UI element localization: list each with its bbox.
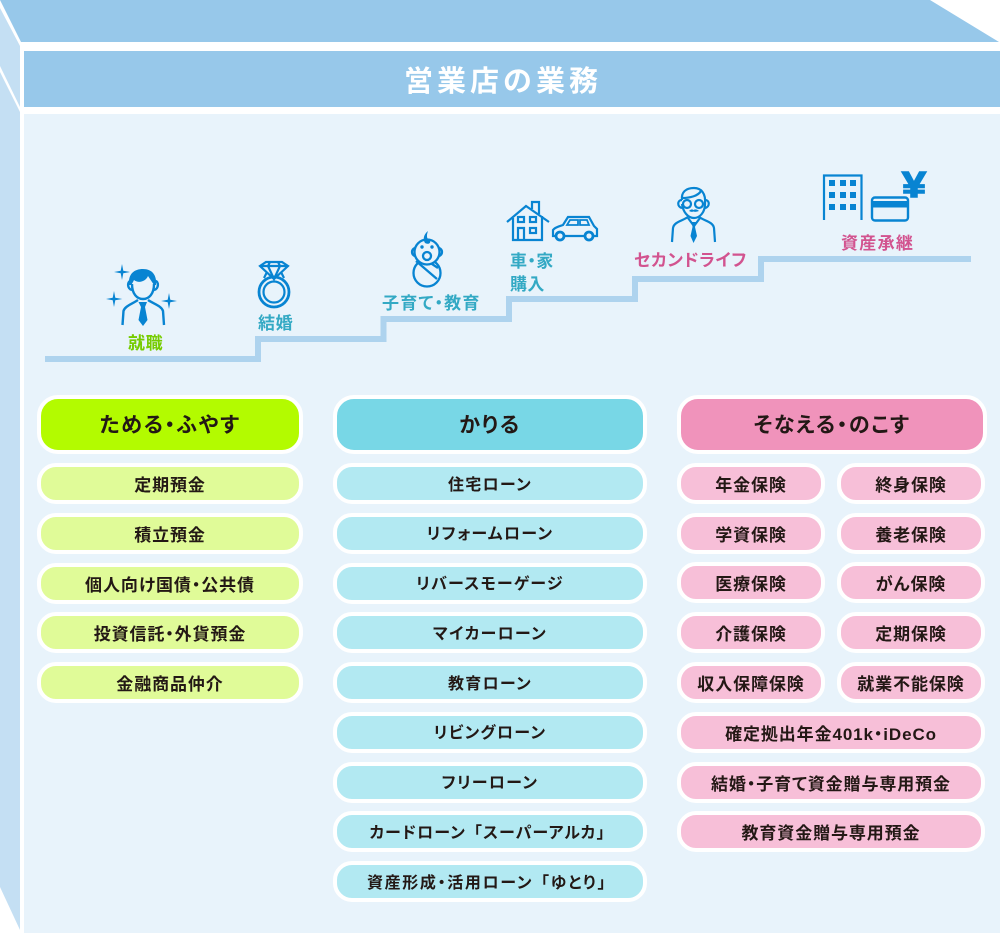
item: 定期保険 [875,625,947,644]
icon: building, card and yen [822,165,928,222]
item: マイカーローン [433,626,547,643]
item [37,513,303,554]
item: リビングローン [434,725,546,742]
item: 教育ローン [448,676,532,692]
label: 車・家 購入: 購入 [510,275,545,294]
item [677,513,825,554]
item: 終身保険 [875,476,947,495]
item [677,712,985,753]
item [37,562,303,604]
item: 確定拠出年金401k・iDeCo [725,725,937,744]
icon: wedding ring [258,260,290,308]
icon: building, card and yen: ¥ [902,165,926,205]
item: 医療保険 [715,574,787,594]
item: 定期預金 [134,476,206,495]
item [333,513,647,554]
item [333,612,647,653]
item [677,463,825,504]
item: 投資信託・外貨預金 [94,625,246,644]
item [37,662,303,703]
item [333,463,647,504]
heading [333,395,647,454]
item: 年金保険 [715,476,787,495]
item: 収入保障保険 [697,675,805,694]
item [837,463,985,504]
item: 養老保険 [875,526,947,545]
icon: employee with sparkles [106,264,177,326]
item: 住宅ローン [448,476,532,494]
item [677,562,825,602]
item: リフォームローン [427,526,553,543]
heading: そなえる・のこす [754,414,910,437]
icon: baby [410,231,444,288]
panel: ためる・ふやす [37,395,303,703]
item: 学資保険 [715,526,787,545]
item [837,562,985,602]
label: 車・家 購入: 車・家 [510,252,554,271]
item [837,662,985,703]
item: 就業不能保険 [857,675,965,694]
item [677,762,985,802]
item [333,811,647,852]
panel: そなえる・のこす [677,395,987,852]
item: 結婚・子育て資金贈与専用預金 [711,774,951,794]
label: 子育て・教育: 子育て・教育 [382,294,481,313]
title: 営業店の業務 [404,66,602,98]
panel: かりる [333,395,647,902]
item: 「 [533,874,551,892]
item [837,612,985,653]
icon: car [552,216,598,242]
item: 「 [466,825,483,842]
item: リバースモーゲージ [416,576,564,593]
item [333,662,647,703]
item: 積立預金 [134,526,206,545]
item: 個人向け国債・公共債 [85,576,255,594]
item: 資産形成・活用ローン ゆとり [367,874,597,892]
item [837,513,985,554]
item [37,463,303,504]
label: 資産承継: 資産承継 [841,234,914,253]
item [333,562,647,604]
label: 就職: 就職 [128,334,163,353]
item: 」 [596,825,614,842]
heading [37,395,303,454]
header band [24,51,1000,107]
icon: senior man [670,186,716,243]
item: 介護保険 [715,625,787,644]
item [677,811,985,852]
item: フリーローン [442,775,538,792]
item [677,662,825,703]
item [37,612,303,653]
item: 金融商品仲介 [116,675,224,694]
item: がん保険 [876,574,946,594]
label: 車・家 購入 [510,252,554,294]
item [333,712,647,753]
label: 結婚: 結婚 [258,314,293,333]
item [333,762,647,802]
item [677,612,825,653]
heading: ためる・ふやす [99,414,241,437]
life stage staircase [45,256,971,362]
heading [677,395,987,454]
icon: house [506,200,550,242]
heading: かりる [459,414,521,437]
item: 教育資金贈与専用預金 [742,824,920,843]
item [333,861,647,902]
label: セカンドライフ: セカンドライフ [634,251,747,270]
item: カードローン スーパーアルカ [369,825,596,842]
item: 」 [597,874,615,892]
